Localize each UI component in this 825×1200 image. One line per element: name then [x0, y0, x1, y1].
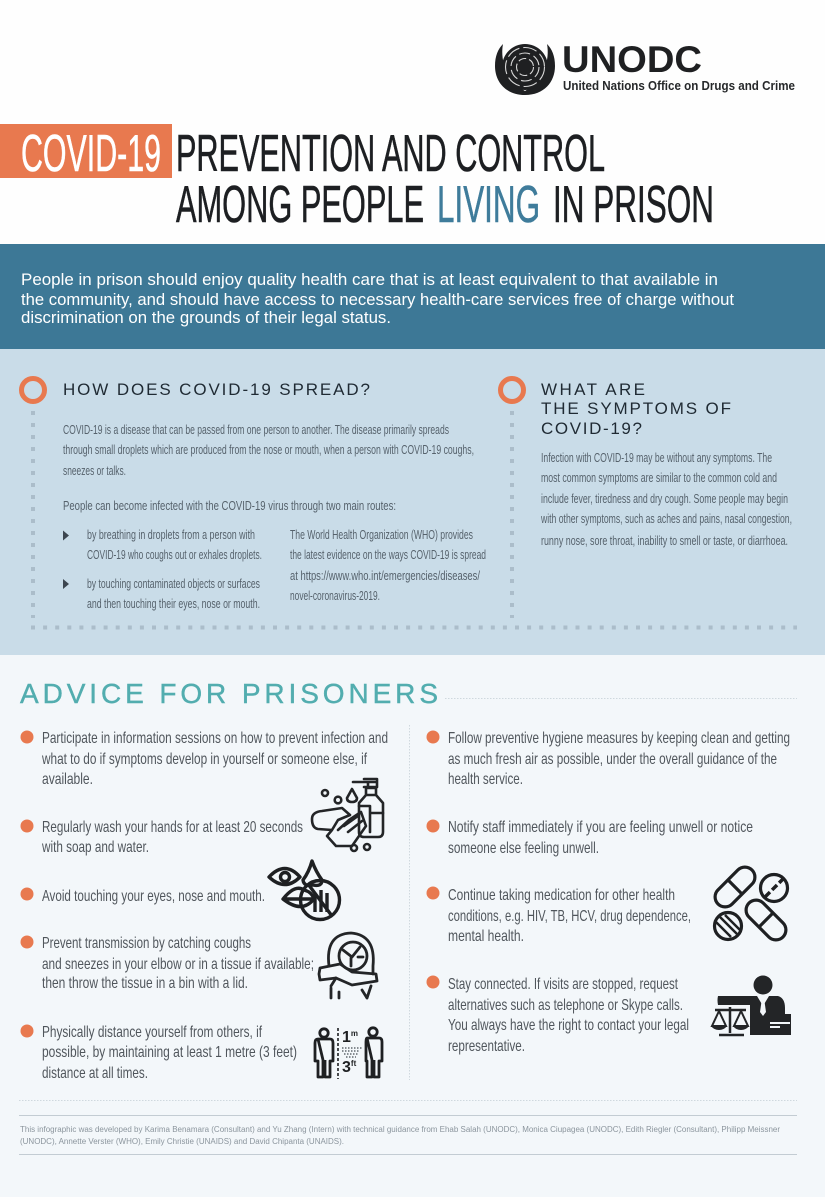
list: transmission routes: and then touching their eyes, nose or mouth.	[87, 597, 260, 611]
advice: notify staff	[426, 819, 753, 857]
heading: symptoms: THE SYMPTOMS OF	[541, 399, 731, 418]
advice: information sessions: Participate in information sessions on how to prevent infection and	[42, 730, 388, 747]
text: spread intro: COVID-19 is a disease that can be passed from one person to another. The disease primarily spreads	[63, 423, 449, 437]
advice: stay connected: alternatives such as telephone or Skype calls.	[448, 997, 683, 1014]
advice: physical distance: distance at all times.	[42, 1065, 148, 1082]
advice: stay connected	[426, 976, 689, 1055]
advice: physical distance: possible, by maintaining at least 1 metre (3 feet)	[42, 1044, 297, 1061]
panel: intro band: the community, and should have access to necessary health-care services free of charge without	[21, 291, 734, 309]
footer credits: (UNODC), Annette Verster (WHO), Emily Christie (UNAIDS) and David Chipanta (UNAIDS).	[20, 1137, 344, 1146]
heading: symptoms: WHAT ARE	[541, 380, 645, 399]
advice: information sessions	[20, 730, 388, 788]
label: 3 feet: ft	[351, 1059, 357, 1068]
advice: medication: Continue taking medication for other health	[448, 887, 675, 904]
icon: eyes nose mouth prohibited	[269, 861, 340, 920]
advice: avoid touching face: Avoid touching your eyes, nose and mouth.	[42, 888, 265, 905]
text: spread intro: through small droplets which are produced from the nose or mouth, when a person with COVID-19 coughs,	[63, 443, 474, 457]
icon: ring marker spread	[22, 378, 44, 402]
advice: information sessions: what to do if symptoms develop in yourself or someone else, if	[41, 751, 367, 768]
advice: medication	[426, 886, 691, 945]
list: transmission routes	[63, 528, 262, 611]
heading: advice: ADVICE FOR PRISONERS	[20, 678, 438, 709]
text: spread intro: People can become infected with the COVID-19 virus through two main routes:	[63, 499, 396, 513]
spray dots	[342, 1048, 362, 1057]
advice: coughs and sneezes: then throw the tissue in a bin with a lid.	[42, 975, 248, 992]
advice: stay connected: Stay connected. If visits are stopped, request	[448, 976, 678, 993]
footer credits: This infographic was developed by Karima Benamara (Consultant) and Yu Zhang (Intern) with technical guidance from Ehab Salah (UNODC), Monica Ciupagea (UNODC), Edith Riegler (Consultant), Philipp Meissner	[20, 1125, 780, 1134]
advice: coughs and sneezes: and sneezes in your elbow or in a tissue if available;	[42, 956, 314, 973]
advice: wash hands: Regularly wash your hands for at least 20 seconds	[42, 819, 303, 836]
panel: intro band: discrimination on the grounds of their legal status.	[21, 309, 391, 327]
label: 1 metre: m	[351, 1029, 358, 1038]
advice: stay connected: representative.	[448, 1038, 525, 1055]
title line 2: LIVING	[437, 176, 540, 234]
advice: hygiene: health service.	[448, 771, 523, 788]
advice: physical distance: Physically distance yourself from others, if	[42, 1024, 262, 1041]
list: transmission routes: COVID-19 who coughs out or exhales droplets.	[87, 548, 262, 562]
title line 2: AMONG PEOPLE	[176, 176, 424, 234]
advice: coughs and sneezes	[20, 935, 314, 992]
text: WHO note: the latest evidence on the ways COVID-19 is spread	[290, 548, 486, 562]
panel: intro band: People in prison should enjoy quality health care that is at least equivalent to that available in	[21, 271, 718, 289]
logo: UNODC	[495, 39, 795, 95]
icon: physical distance	[315, 1028, 382, 1079]
advice: hygiene	[426, 730, 790, 788]
title tag: COVID-19: COVID-19	[21, 125, 161, 183]
text: WHO note: at https://www.who.int/emergencies/diseases/	[290, 569, 480, 583]
text: WHO note: novel-coronavirus-2019.	[290, 589, 380, 603]
heading: symptoms: COVID-19?	[541, 419, 642, 438]
panel: advice for prisoners	[0, 655, 825, 1197]
advice: physical distance	[20, 1024, 297, 1082]
advice: medication: mental health.	[448, 928, 524, 945]
advice: wash hands	[20, 819, 303, 856]
advice: medication: conditions, e.g. HIV, TB, HCV, drug dependence,	[448, 908, 691, 925]
icon: UN emblem	[495, 44, 555, 95]
label: 3 feet: 3	[342, 1059, 351, 1076]
heading: symptoms	[541, 380, 731, 438]
footer credits	[19, 1115, 797, 1155]
title line 2: IN PRISON	[553, 176, 714, 234]
advice: wash hands: with soap and water.	[41, 839, 149, 856]
list: transmission routes: by touching contaminated objects or surfaces	[87, 577, 260, 591]
advice: stay connected: You always have the right to contact your legal	[448, 1017, 689, 1034]
icon: hand washing	[312, 779, 383, 851]
advice: information sessions: available.	[42, 771, 93, 788]
icon: legal representative	[711, 976, 791, 1035]
icon: ring marker symptoms	[500, 378, 524, 402]
text: spread intro	[63, 423, 474, 513]
heading: how does COVID-19 spread: HOW DOES COVID-19 SPREAD?	[63, 380, 370, 399]
text: symptoms	[540, 451, 792, 548]
text: WHO note	[290, 528, 486, 603]
advice: notify staff: someone else feeling unwell.	[448, 840, 599, 857]
label: 1 metre: 1	[342, 1029, 351, 1046]
advice: avoid touching face	[20, 888, 265, 905]
icon: pills	[711, 863, 790, 944]
panel: intro band	[0, 244, 825, 349]
title	[0, 124, 714, 234]
text: WHO note: The World Health Organization (WHO) provides	[290, 528, 473, 542]
logo wordmark: UNODC	[562, 39, 702, 80]
logo subtitle: United Nations Office on Drugs and Crime	[563, 78, 795, 93]
text: spread intro: sneezes or talks.	[63, 464, 126, 478]
advice: coughs and sneezes: Prevent transmission by catching coughs	[42, 935, 251, 952]
icon: cough into elbow	[319, 933, 377, 998]
panel: spread and symptoms	[0, 349, 825, 655]
list: transmission routes: by breathing in droplets from a person with	[87, 528, 255, 542]
